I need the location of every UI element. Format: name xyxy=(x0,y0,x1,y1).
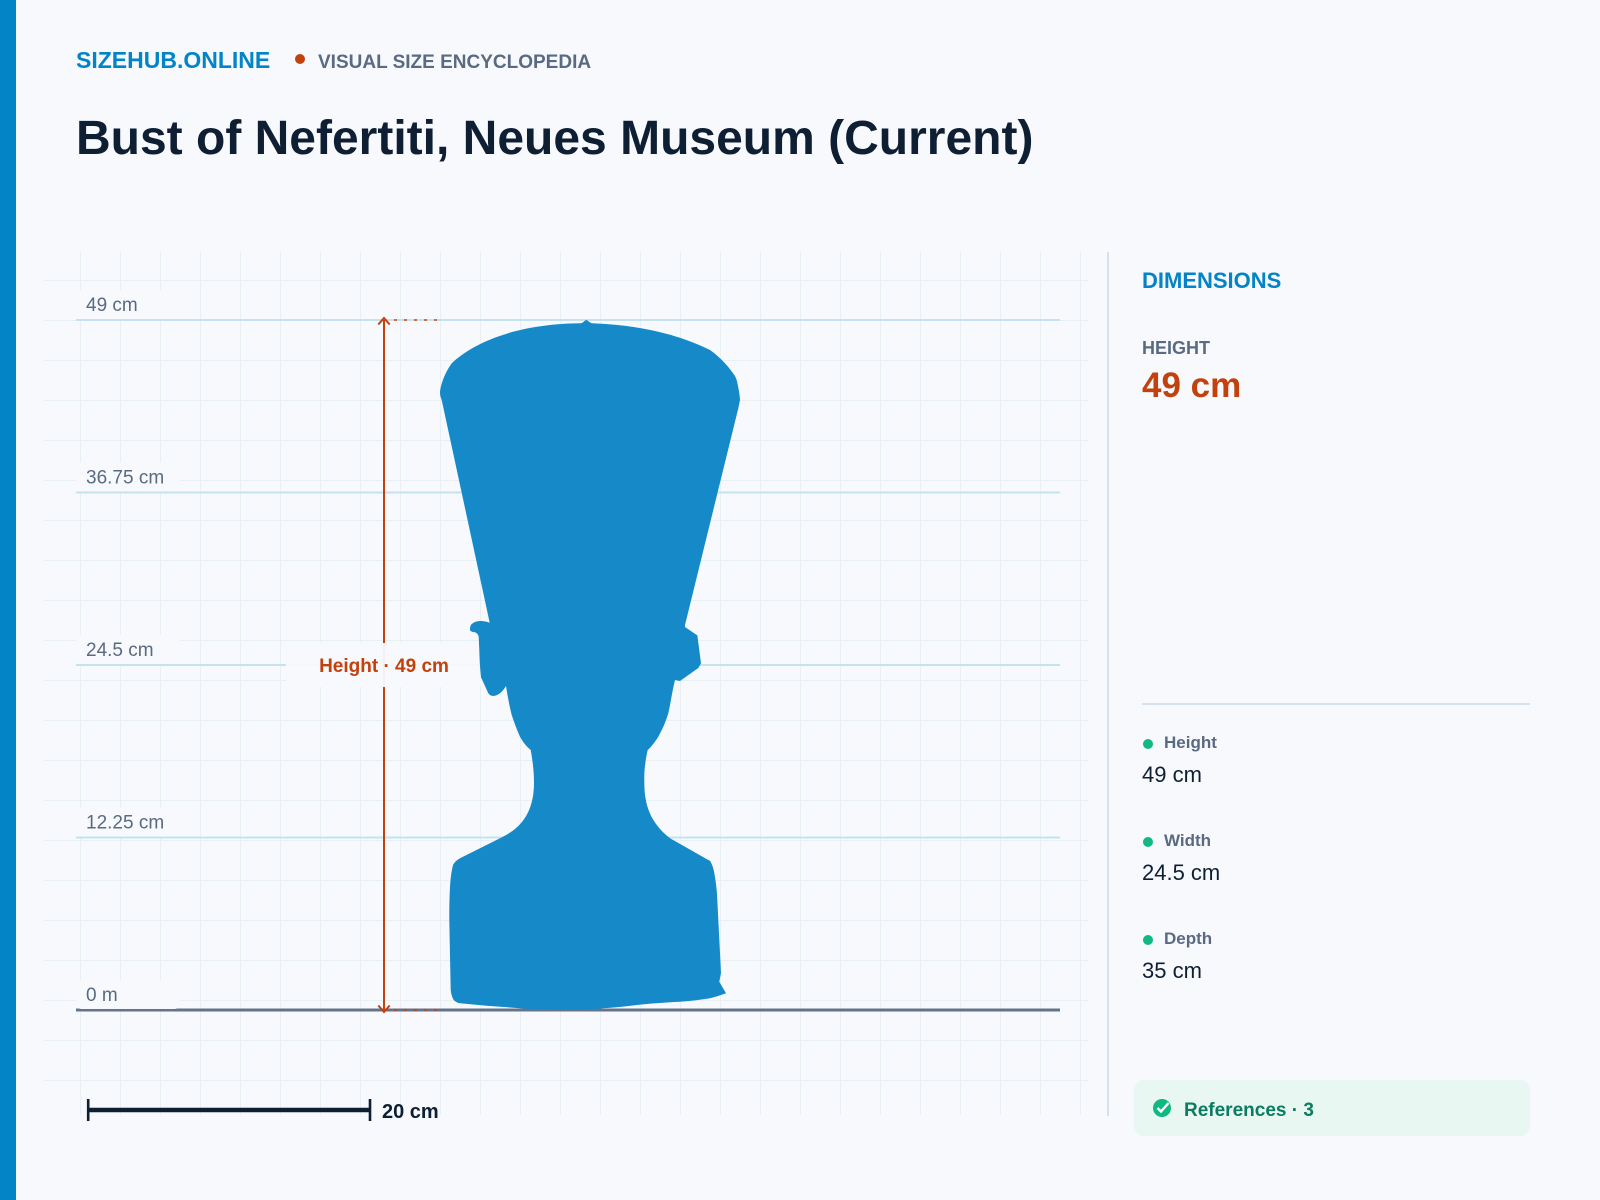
stat: depth: 35 cm xyxy=(1142,958,1202,983)
stat: depth: Depth xyxy=(1164,929,1212,948)
panel heading: DIMENSIONS xyxy=(1142,268,1281,293)
stat: depth xyxy=(1142,929,1212,983)
stat: width: Width xyxy=(1164,831,1211,850)
stat: height: 49 cm xyxy=(1142,762,1202,787)
height label: Height · 49 cm xyxy=(319,656,449,677)
left accent bar xyxy=(0,0,16,1200)
primary height value: HEIGHT xyxy=(1142,338,1210,358)
references badge: References · 3 xyxy=(1184,1100,1314,1121)
header: brand line: VISUAL SIZE ENCYCLOPEDIA xyxy=(318,52,591,73)
axis labels: 0 m xyxy=(86,985,118,1006)
title: Bust of Nefertiti, Neues Museum (Current) xyxy=(76,112,1033,165)
axis labels: 24.5 cm xyxy=(86,640,154,661)
chart: size comparison xyxy=(44,252,1088,1123)
primary height value xyxy=(1142,338,1241,405)
header: brand line xyxy=(76,47,591,73)
scale bar xyxy=(88,1099,439,1123)
reference lines xyxy=(76,320,1060,1010)
height label xyxy=(286,643,482,687)
stat: height: Height xyxy=(1164,733,1217,752)
side panel: dimensions xyxy=(1107,252,1530,1136)
references badge xyxy=(1134,1080,1530,1136)
height arrow xyxy=(378,318,438,1012)
header: brand line: SIZEHUB.ONLINE xyxy=(76,47,270,73)
axis labels: 12.25 cm xyxy=(86,812,164,834)
stat: width: 24.5 cm xyxy=(1142,860,1220,885)
primary height value: 49 cm xyxy=(1142,366,1241,405)
axis labels: 36.75 cm xyxy=(86,468,164,488)
stat: width xyxy=(1142,831,1220,885)
scale bar: 20 cm xyxy=(382,1101,439,1123)
axis labels: 49 cm xyxy=(86,295,138,316)
axis labels xyxy=(76,290,180,1009)
stat: height xyxy=(1142,733,1217,787)
silhouette: bust of Nefertiti xyxy=(440,320,740,1010)
